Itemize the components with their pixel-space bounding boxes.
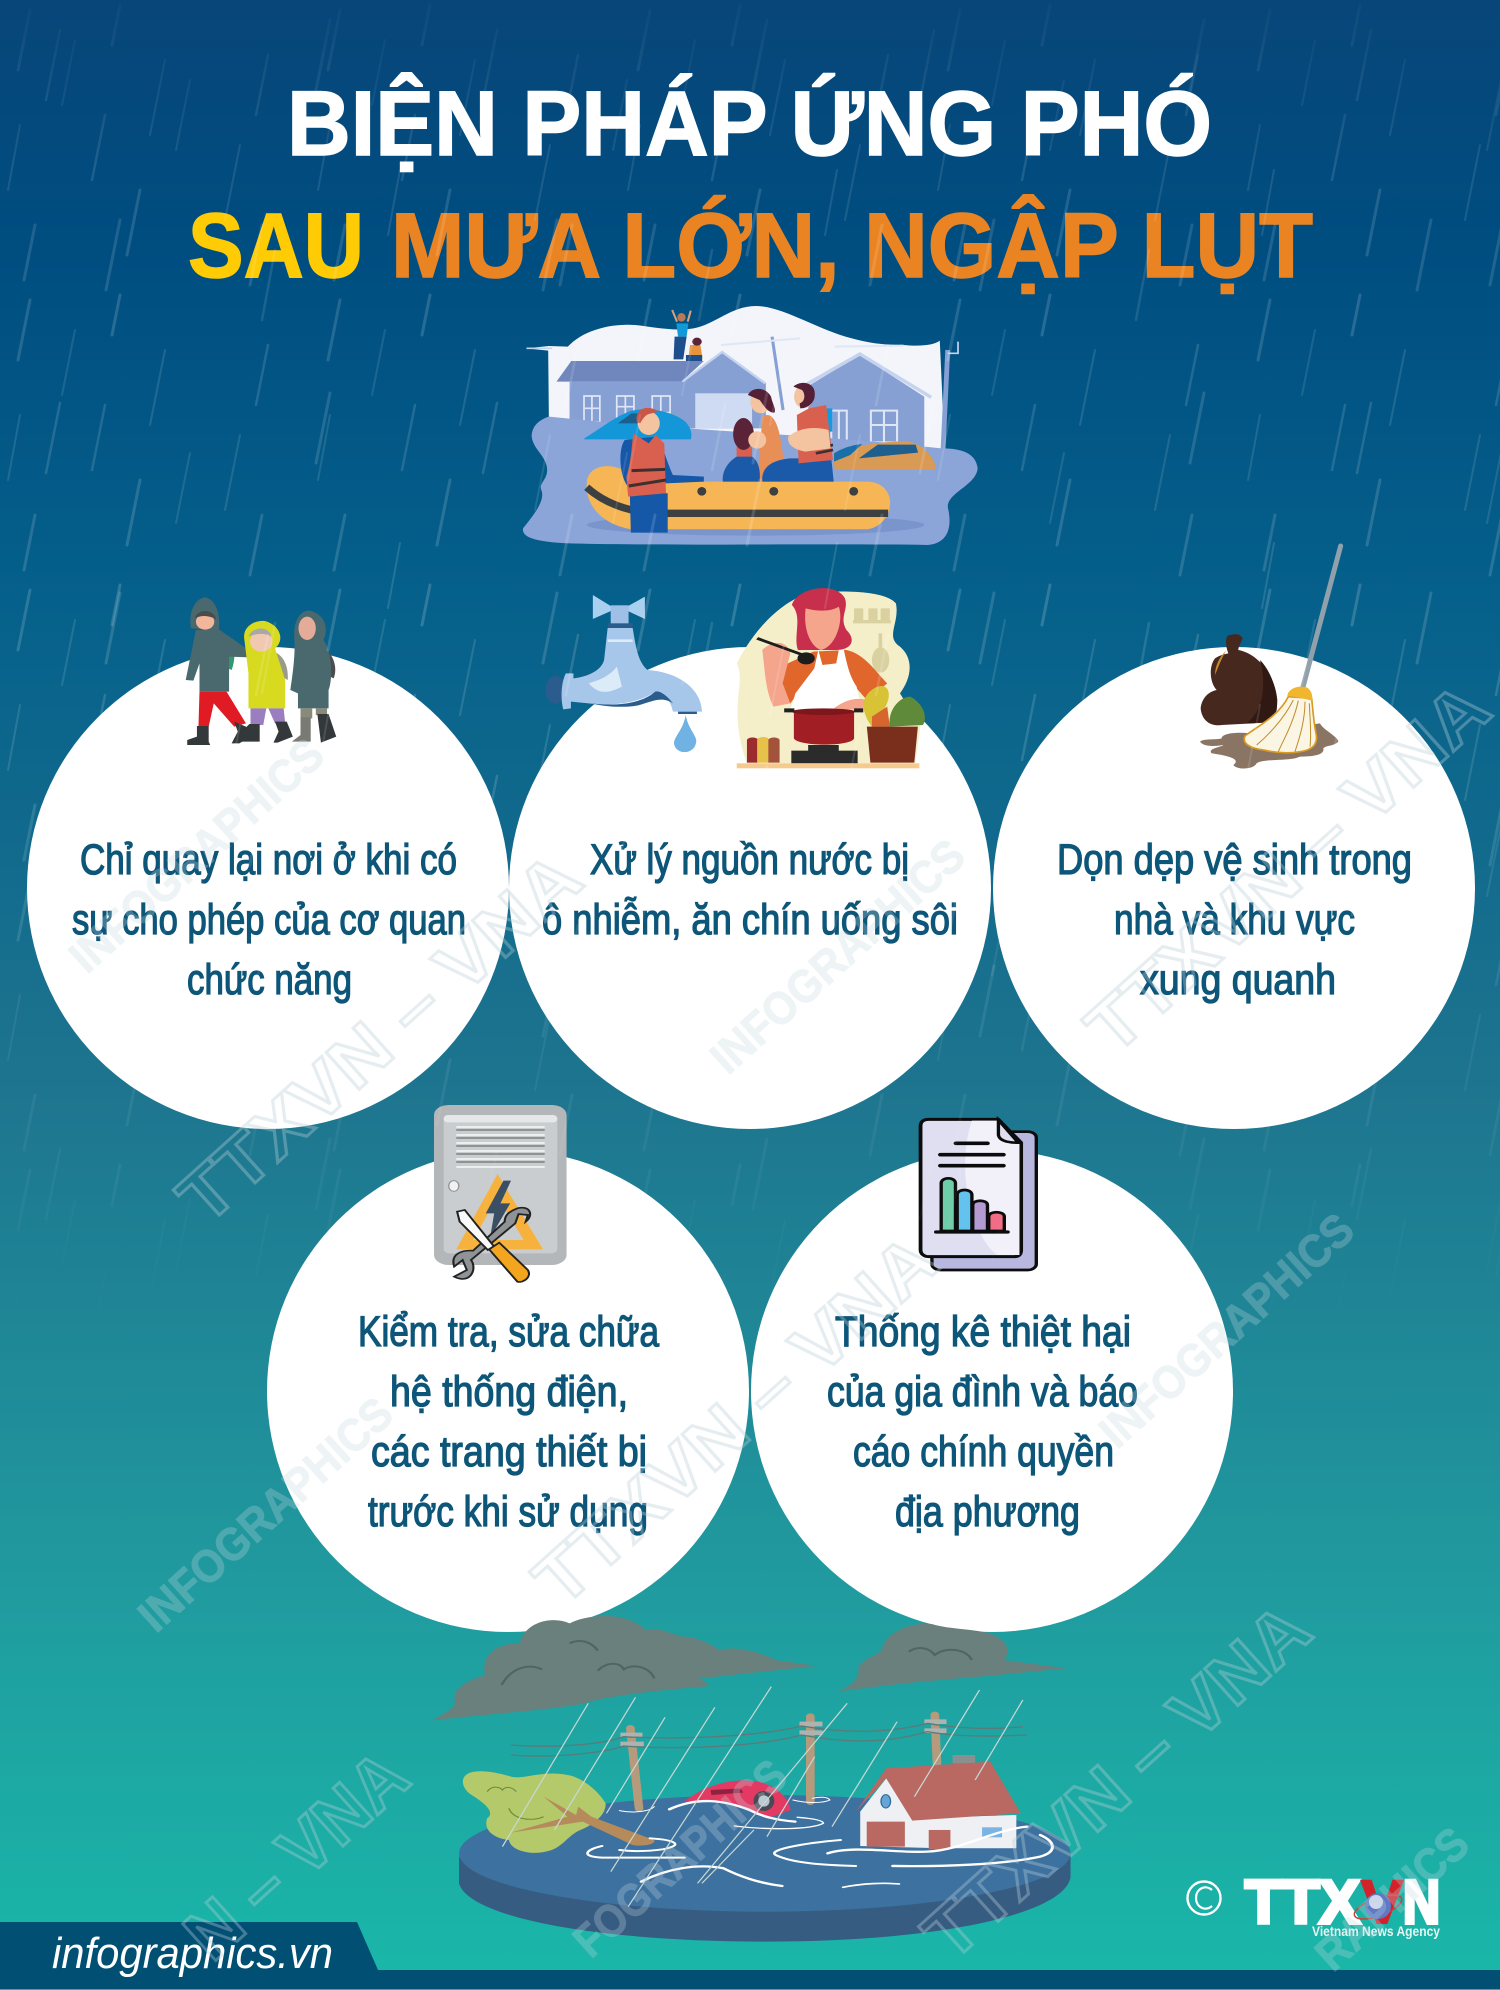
watermarks [59,667,1500,1981]
text: electrical [358,1308,659,1536]
text: damage report: Thống kê thiệt hại [835,1308,1131,1356]
TTXVN letters [1245,1868,1440,1936]
title [188,72,1313,297]
title line 1: BIỆN PHÁP ỨNG PHÓ [287,72,1212,175]
watermarks: FOGRAPHICS [563,1749,797,1967]
blue car [584,409,691,439]
watermarks: RAPHICS [1305,1817,1479,1981]
TTXVN letters: N [1403,1868,1440,1936]
water ripples [587,1797,1052,1887]
circle 5 background [751,1150,1233,1632]
text: electrical: các trang thiết bị [371,1428,647,1476]
watermarks: INFOGRAPHICS [128,1387,403,1641]
circle 3 background [993,647,1475,1129]
watermarks: INFOGRAPHICS [700,829,975,1083]
orange car [833,441,935,470]
TTXVN letters: TTX [1245,1868,1360,1936]
circle 1 background [27,647,509,1129]
text: return home: Chỉ quay lại nơi ở khi có [80,836,457,884]
icon: garbage bag and mop [1200,546,1341,769]
globe [1351,1890,1405,1924]
website label: infographics.vn [52,1929,333,1978]
panel: circle 2 [509,647,991,1129]
rain [502,1687,1023,1907]
title line 2: mưa lớn, ngập lụt: MƯA LỚN, NGẬP LỤT [391,194,1313,297]
icon: electrical cabinet with tools [434,1105,567,1282]
watermarks: TTXVN – VNA [519,1219,953,1621]
text: damage report: địa phương [895,1488,1080,1536]
panel: circle 3 [993,647,1475,1129]
copyright symbol [1188,1882,1220,1914]
watermarks: INFOGRAPHICS [59,728,334,982]
panel: circle 4 [267,1150,749,1632]
text: water: ô nhiễm, ăn chín uống sôi [542,896,958,944]
car [685,1780,791,1818]
house [860,1778,1016,1848]
people on roof [676,323,688,337]
boat [587,466,890,529]
icon: woman cooking [737,588,925,768]
watermarks: TTXVN – VNA [1071,667,1500,1069]
icon: report document with bar chart [921,1119,1036,1270]
text: return home: chức năng [187,956,352,1004]
footer bar [0,1922,1500,1989]
text: cleaning: xung quanh [1140,956,1336,1004]
text: electrical: hệ thống điện, [390,1368,628,1416]
storm clouds [431,1616,1066,1721]
rescuer [630,493,668,533]
panel: circle 5 [751,1150,1233,1632]
text: electrical: trước khi sử dụng [368,1488,648,1536]
panel: circle 1 [27,647,509,1129]
circle 4 background [267,1150,749,1632]
poles [630,1715,937,1808]
woman and child [757,415,783,482]
man [762,458,834,482]
text: electrical: Kiểm tra, sửa chữa [358,1308,659,1356]
text: water: Xử lý nguồn nước bị [590,836,909,884]
illustration: flooded village with clouds [431,1616,1071,1942]
watermarks: TTXVN – VNA [908,1589,1326,1976]
text: return home [72,836,466,1004]
icon: three people in raincoats [186,597,336,745]
illustration: flood rescue boat [523,306,978,545]
logo: TTXVN [1188,1868,1440,1939]
rain overlay [7,18,1500,1206]
watermarks: INFOGRAPHICS [1089,1203,1364,1457]
TTXVN letters: V [1361,1868,1403,1936]
watermarks: TTXVN – VNA [163,837,597,1239]
icon: water tap [545,595,702,752]
text: cleaning: Dọn dẹp vệ sinh trong [1057,836,1412,884]
agency name: Vietnam News Agency [1312,1924,1440,1939]
text: damage report: cáo chính quyền [853,1428,1114,1476]
text: water [542,836,958,944]
disc [459,1853,1071,1942]
text: damage report: của gia đình và báo [827,1368,1138,1416]
text: cleaning: nhà và khu vực [1114,896,1355,944]
text: return home: sự cho phép của cơ quan [72,896,466,944]
title line 2: sau: SAU [188,195,364,297]
text: damage report [827,1308,1138,1536]
text: cleaning [1057,836,1412,1004]
circle 2 background [509,647,991,1129]
watermarks: N – VNA [170,1735,424,1976]
tree [463,1771,606,1853]
